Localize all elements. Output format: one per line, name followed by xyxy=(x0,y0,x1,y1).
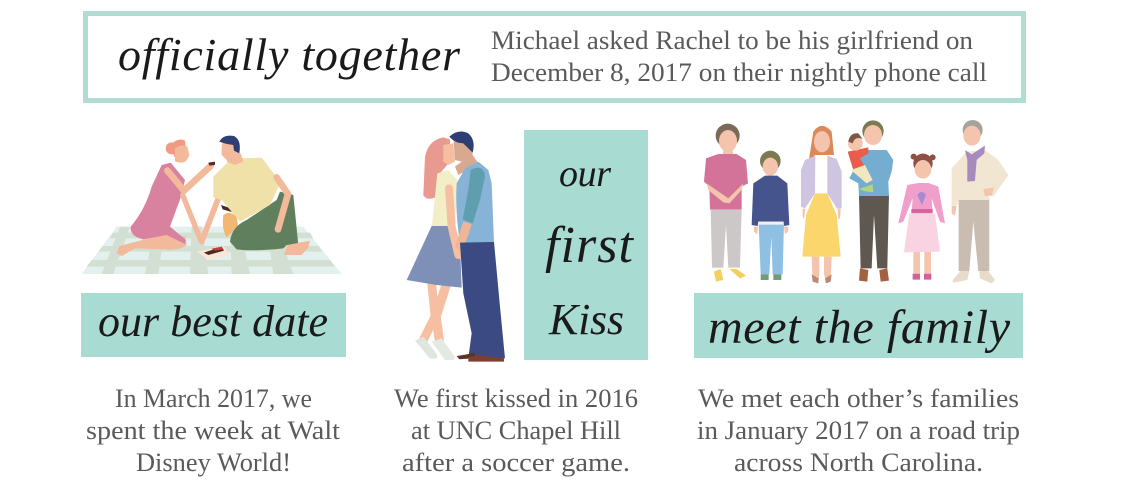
text block: first kiss description xyxy=(394,384,638,477)
figure: woman in yellow skirt xyxy=(801,126,842,283)
illustration: kissing couple xyxy=(407,131,505,362)
text block: first kiss description: after a soccer game. xyxy=(402,448,630,477)
text block: officially together description: Michael asked Rachel to be his girlfriend on xyxy=(491,26,973,55)
heading: our first kiss: Kiss xyxy=(548,295,624,344)
figure: man holding child xyxy=(848,120,893,282)
illustration: couple on picnic blanket xyxy=(82,136,342,274)
text block: first kiss description: at UNC Chapel Hill xyxy=(411,416,621,445)
label panel: our first kiss xyxy=(524,130,648,360)
panel: meet the family xyxy=(694,120,1023,477)
heading: our best date: our best date xyxy=(98,297,328,346)
text block: officially together description xyxy=(491,26,987,87)
panel: our best date xyxy=(81,136,346,477)
label panel: meet the family xyxy=(694,293,1023,358)
panel: officially together banner xyxy=(86,14,1024,100)
text block: family description: We met each other’s families xyxy=(698,384,1019,413)
figure: woman in pink shirt xyxy=(704,124,748,282)
text block: family description: in January 2017 on a road trip xyxy=(697,416,1020,445)
text block: best date description: In March 2017, we xyxy=(115,384,312,413)
text block: best date description: Disney World! xyxy=(136,448,291,477)
illustration: family of seven xyxy=(704,120,1008,283)
text block: first kiss description: We first kissed in 2016 xyxy=(394,384,638,413)
text block: family description: across North Carolina. xyxy=(734,448,983,477)
figure: grandfather with scarf xyxy=(952,120,1008,283)
text block: family description xyxy=(697,384,1020,477)
heading: meet the family: meet the family xyxy=(708,301,1011,354)
label panel: our best date xyxy=(81,293,346,357)
heading: our first kiss: first xyxy=(545,217,635,274)
text block: best date description: spent the week at Walt xyxy=(86,416,341,445)
figure: girl in pink dress xyxy=(898,154,945,280)
heading: officially together: officially together xyxy=(118,29,461,80)
heading: our first kiss xyxy=(545,153,635,344)
text block: best date description xyxy=(86,384,341,477)
panel: our first kiss xyxy=(394,130,648,477)
figure: boy in hoodie xyxy=(752,151,789,280)
heading: our first kiss: our xyxy=(559,153,611,195)
text block: officially together description: December 8, 2017 on their nightly phone call xyxy=(491,58,987,87)
